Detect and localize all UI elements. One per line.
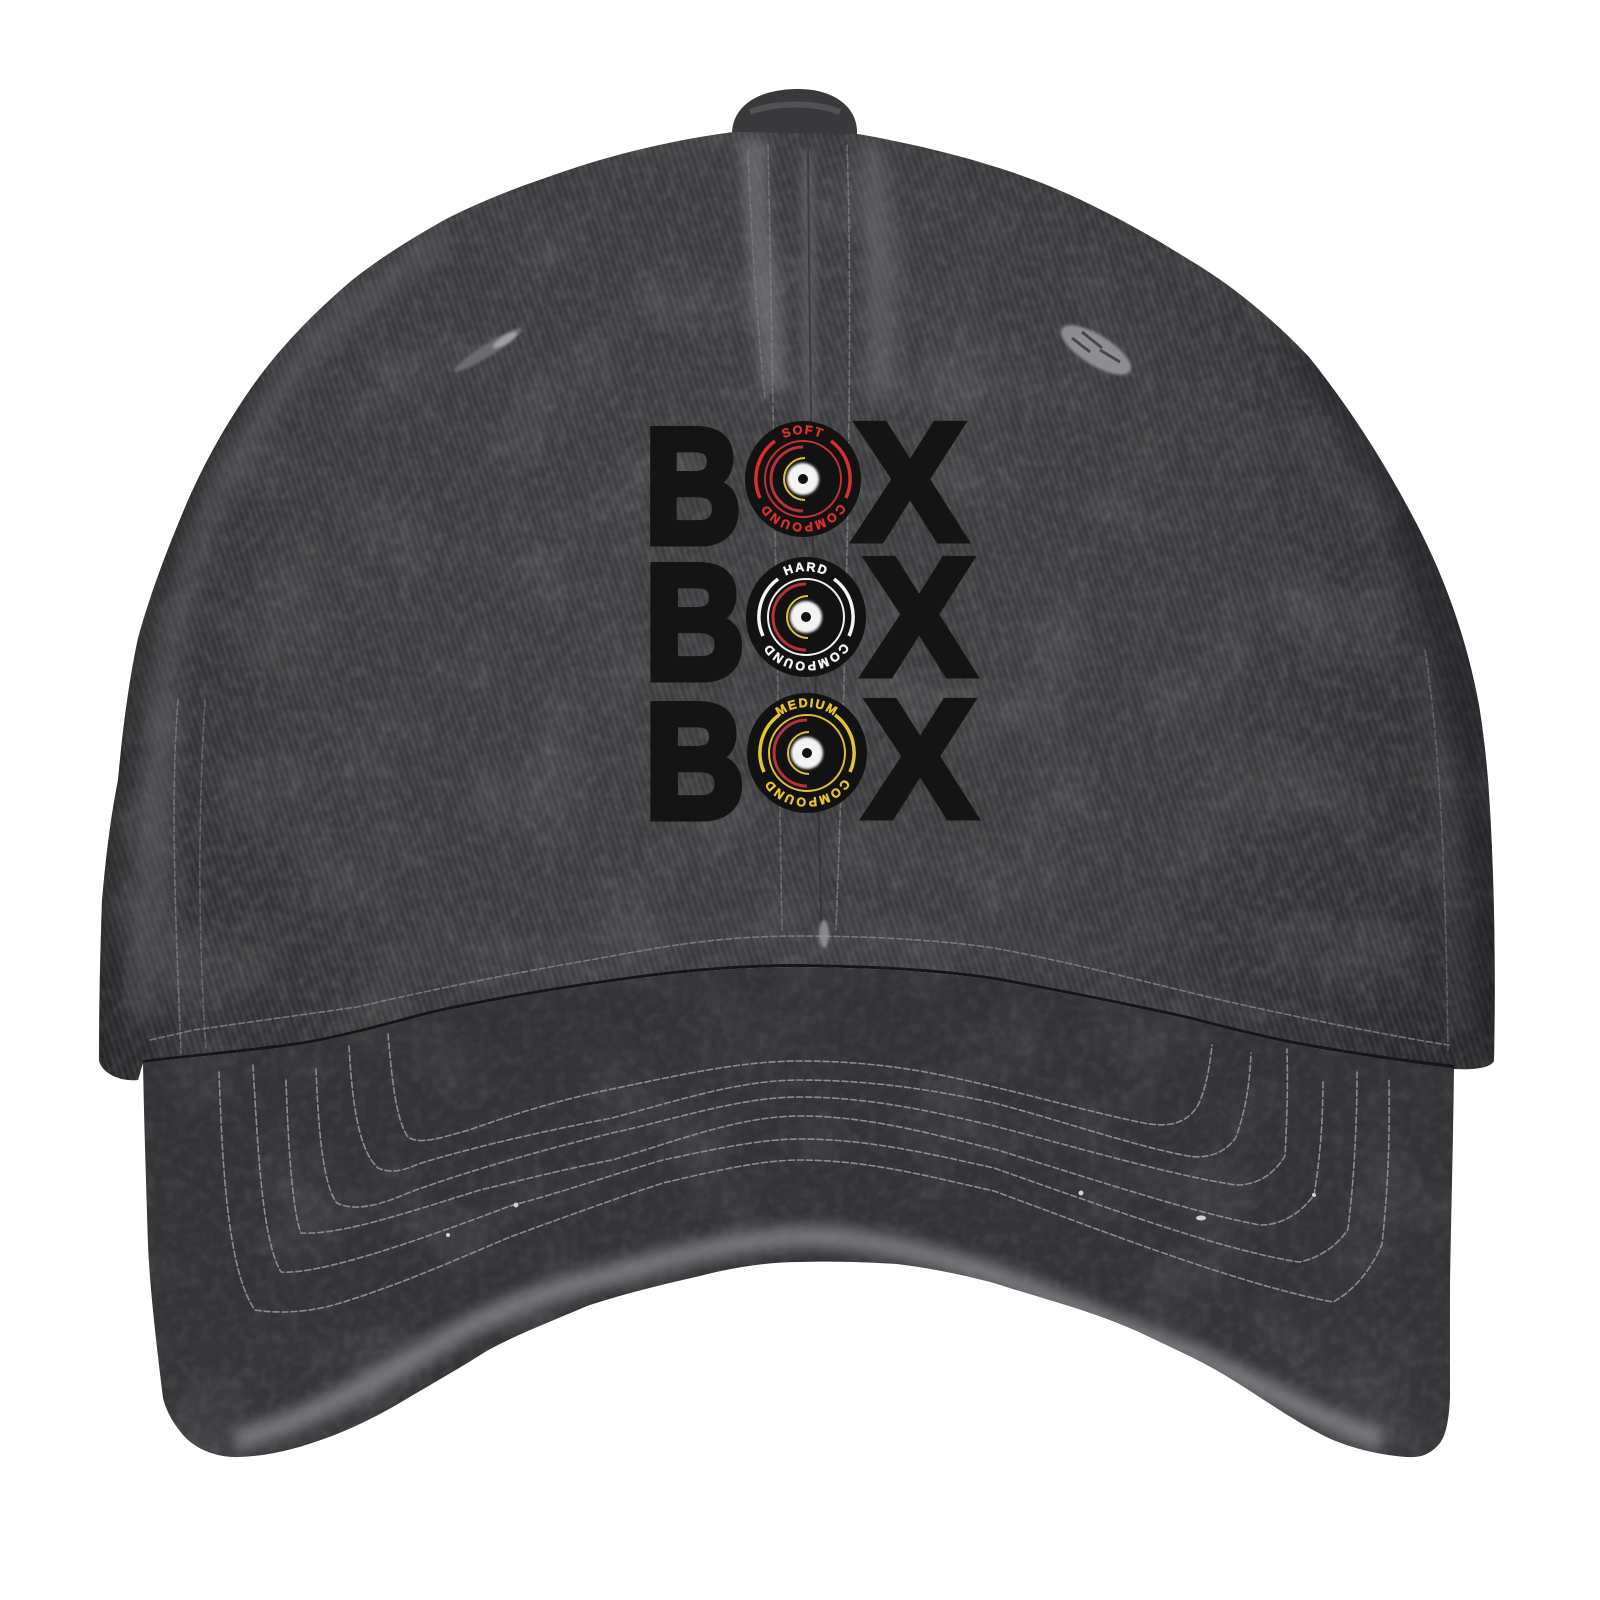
tyre label: COMPOUND (764, 644, 848, 671)
edge shading (1309, 345, 1500, 1060)
row 3: MEDIUM compound (645, 665, 981, 853)
visor stitching rows (219, 1034, 1389, 1312)
tyre label: SOFT (782, 425, 824, 438)
cap button (732, 89, 857, 143)
letter X: X (864, 665, 976, 853)
tyre label: MEDIUM (774, 698, 838, 716)
logo: BOX BOX BOX with tyres (645, 388, 981, 853)
twill texture (99, 132, 1490, 1080)
panel stitching (174, 145, 1448, 1053)
panel highlights (752, 140, 775, 390)
worn edge highlights (142, 240, 448, 1020)
seam stitching above visor (150, 936, 1449, 1045)
eyelet left (454, 328, 522, 372)
letter X: X (854, 388, 966, 576)
visor grain texture (120, 950, 1480, 1470)
visor wash mottling (179, 1026, 1426, 1457)
eyelet right (1060, 324, 1132, 376)
letter X: X (863, 523, 975, 711)
row 2: HARD compound (645, 523, 980, 712)
illustration: washed denim baseball cap (99, 89, 1495, 1458)
bright stitch specks (446, 1190, 1316, 1237)
tyre label: HARD (782, 562, 827, 576)
crown wash mottling (106, 132, 1490, 1054)
tyre: soft (745, 421, 861, 537)
letter B: B (645, 531, 744, 712)
letter B: B (645, 670, 744, 851)
tyre label: COMPOUND (766, 780, 850, 807)
tyre: medium (747, 693, 867, 813)
stitch knot at seam base (819, 920, 829, 948)
visor (120, 950, 1480, 1470)
crown (99, 132, 1495, 1080)
visor worn edge highlight (235, 1237, 1382, 1440)
tyre: hard (746, 557, 866, 677)
row 1: SOFT compound (645, 388, 971, 577)
center seam (808, 150, 822, 945)
tyre label: COMPOUND (762, 504, 846, 532)
letter B: B (645, 397, 741, 577)
crown bottom seam line (143, 967, 1454, 1068)
grain texture (100, 133, 1493, 1079)
